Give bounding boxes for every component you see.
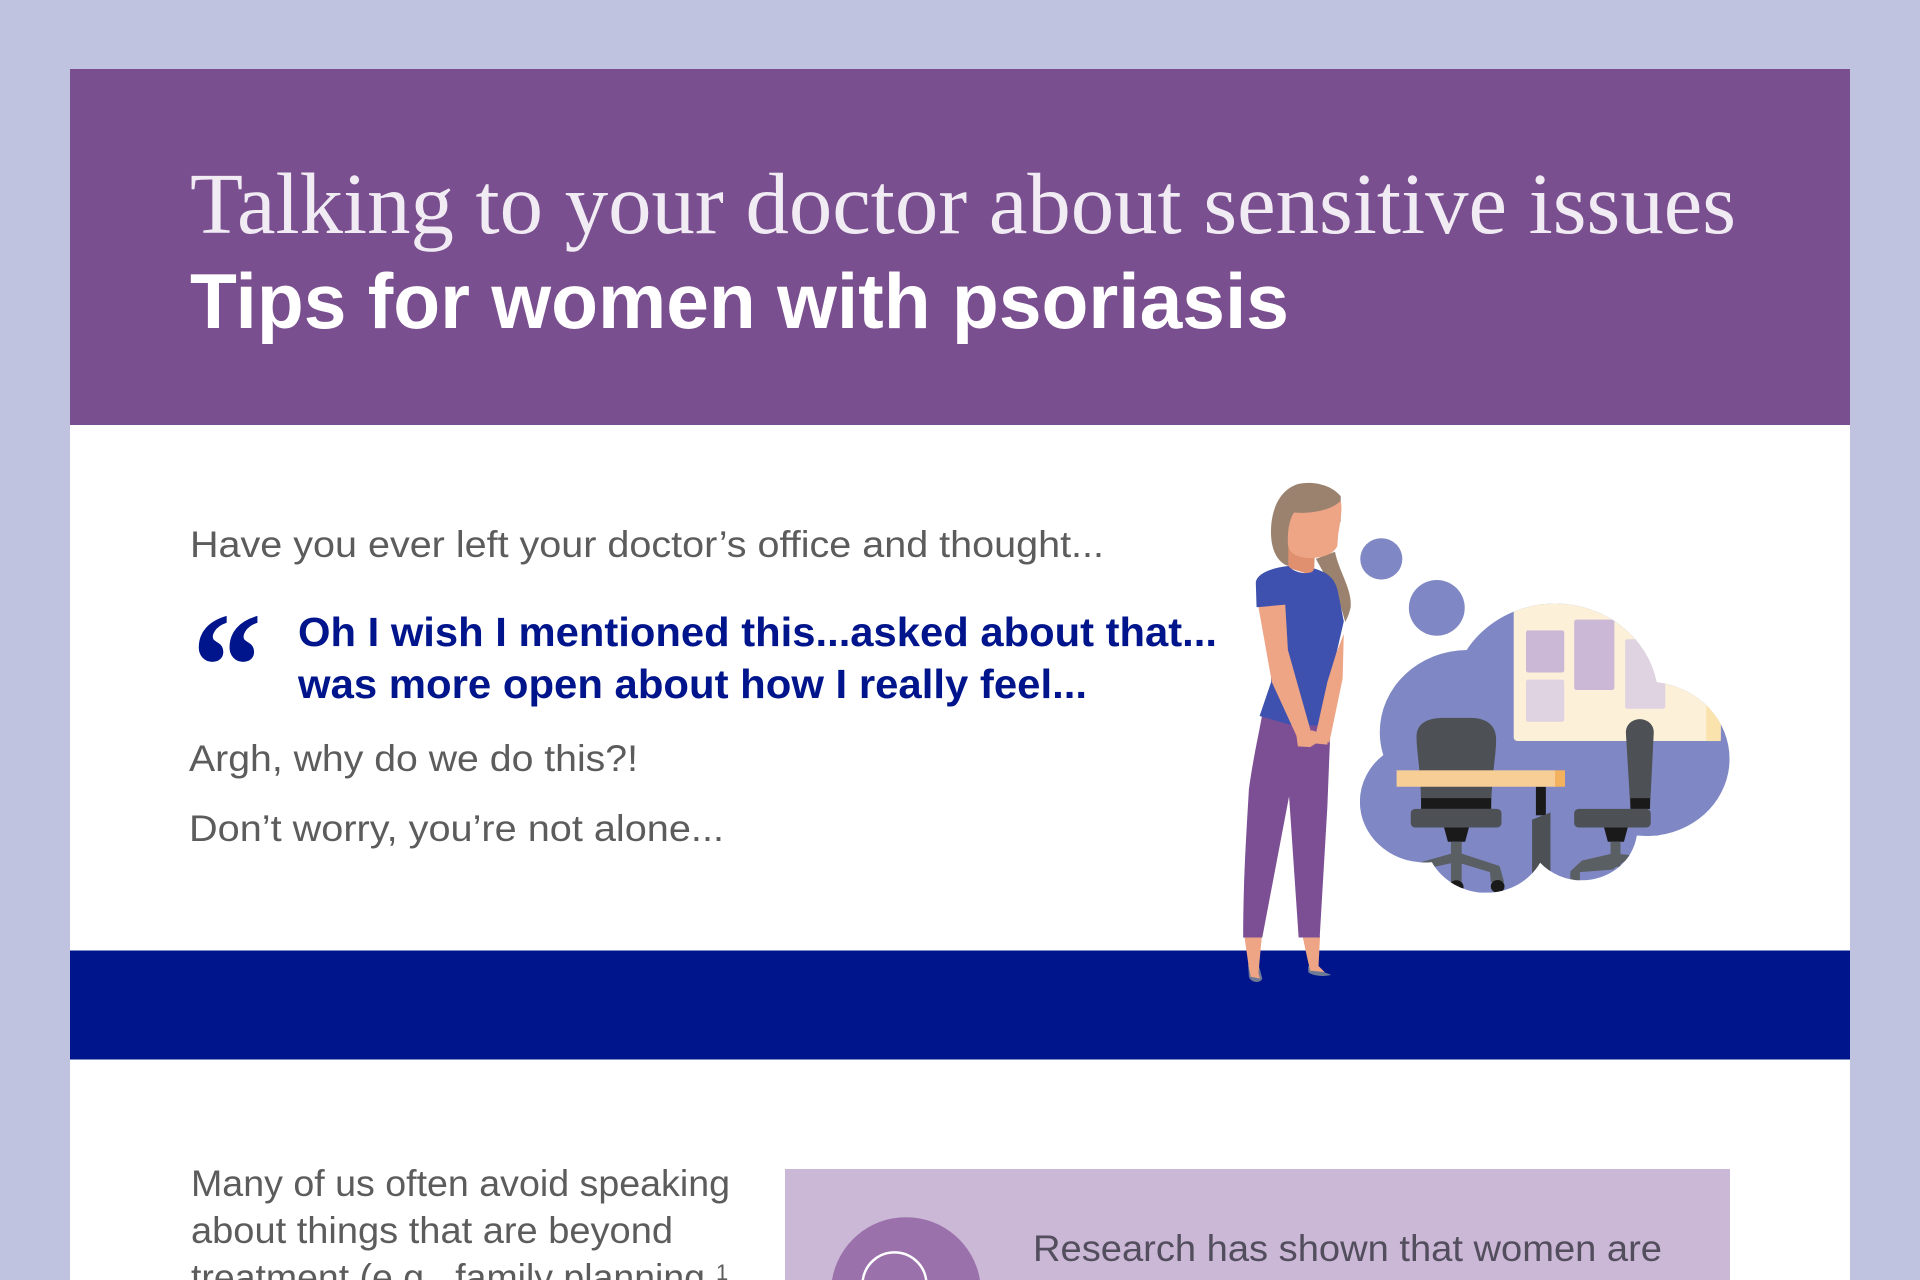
quote text: was more open about how I really feel... — [297, 661, 1087, 707]
desk — [1536, 787, 1546, 815]
callout panel: research — [785, 1169, 1730, 1280]
hands — [1296, 730, 1328, 747]
lower legs — [1244, 936, 1262, 979]
noticeboard — [1514, 593, 1721, 741]
thought bubble small — [1360, 538, 1402, 580]
body text: left column: Many of us often avoid speaking — [191, 1163, 730, 1204]
body text: left column — [191, 1163, 730, 1280]
quote mark: “ — [192, 582, 262, 750]
quote text: Oh I wish I mentioned this...asked about that... — [298, 609, 1217, 655]
thought cloud with office — [1360, 604, 1730, 893]
text: don't worry: Don’t worry, you’re not alone... — [189, 808, 724, 849]
trousers — [1243, 714, 1330, 937]
shirt — [1256, 566, 1344, 726]
title line 2: Tips for women with psoriasis — [190, 257, 1289, 345]
title line 1: Talking to your doctor about sensitive issues — [190, 155, 1736, 252]
icon: circle badge — [832, 1217, 980, 1280]
arms — [1258, 605, 1312, 736]
neck — [1288, 545, 1315, 576]
text: argh: Argh, why do we do this?! — [189, 738, 638, 779]
navy floor band — [70, 950, 1850, 1060]
right chair — [1626, 719, 1654, 809]
face — [1288, 501, 1341, 558]
woman figure — [1243, 483, 1351, 982]
callout text: Research has shown that women are — [1033, 1228, 1662, 1269]
illustration: woman and thought cloud — [1243, 483, 1739, 982]
intro text: Have you ever left your doctor’s office and thought... — [190, 524, 1104, 565]
thought bubble medium — [1409, 580, 1465, 636]
quote text — [297, 609, 1217, 707]
feet and shoes — [1248, 964, 1262, 982]
body text: left column: about things that are beyond — [191, 1210, 673, 1251]
header banner — [70, 69, 1850, 425]
hair behind — [1316, 552, 1351, 622]
left chair — [1417, 718, 1496, 809]
